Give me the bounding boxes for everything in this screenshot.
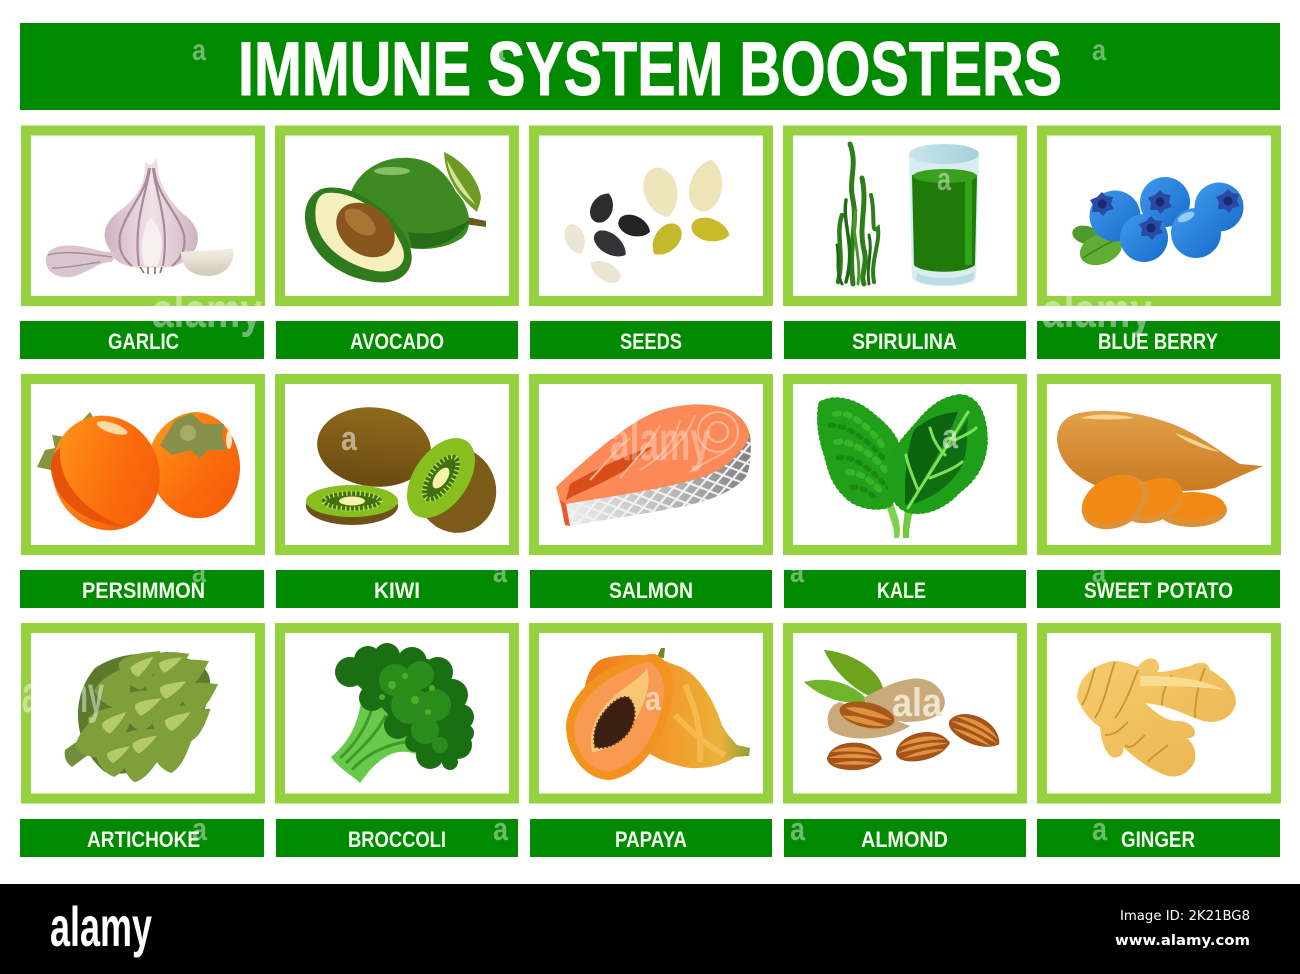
label: papaya: PAPAYA [615,827,687,852]
icon: kiwis [306,402,506,542]
icon: ginger [1077,658,1236,776]
footer bar [0,884,1300,974]
label: almond: ALMOND [861,827,948,852]
label: blue berry [1037,285,1280,359]
label: salmon [530,570,772,608]
label: persimmon: PERSIMMON [82,578,205,603]
label: kiwi: KIWI [374,578,420,603]
label: spirulina: SPIRULINA [852,329,957,354]
label: avocado: AVOCADO [350,329,444,354]
title banner: a [192,34,206,67]
label: seeds: SEEDS [620,329,682,354]
icon: sweet potato [1057,411,1263,540]
icon: spirulina glass [909,144,979,286]
label: ginger [1037,811,1280,857]
label: spirulina [784,321,1026,359]
panel: kale [784,379,1026,608]
panel: kiwi [276,379,518,608]
image id: Image ID: 2K21BG8 [1120,909,1250,924]
label: seeds [530,321,772,359]
icon: artichoke [22,637,225,784]
title banner: a [1092,34,1106,67]
title banner [20,23,1280,112]
label: sweet potato: SWEET POTATO [1084,578,1233,603]
icon: artichoke: alamy [22,666,104,724]
label: kale: a [790,556,804,589]
icon: blueberries [1070,177,1244,271]
label: garlic: alamy [152,285,262,338]
label: blue berry: alamy [1042,285,1152,338]
panel: ginger [1037,628,1280,857]
label: kiwi: a [493,556,507,589]
label: sweet potato [1037,556,1280,608]
label: salmon: SALMON [609,578,693,603]
icon: kiwis: a [341,420,358,458]
panel: avocado [276,130,518,359]
icon: broccoli [331,643,474,783]
icon: kale leaves [822,399,983,538]
panel: broccoli [276,628,518,857]
logo: alamy: alamy [50,895,152,958]
label: kiwi [276,556,518,608]
label: broccoli [276,811,518,857]
icon: almonds: ala [892,681,943,725]
icon: spirulina glass: a [937,161,951,197]
label: almond [784,811,1026,857]
label: artichoke: a [192,811,207,847]
panel: artichoke [20,628,264,857]
label: ginger: GINGER [1121,827,1195,852]
label: kale [784,556,1026,608]
panel: sweet potato [1037,379,1280,608]
icon: papaya: a [645,680,662,718]
label: persimmon: a [192,556,206,589]
icon: papaya [566,648,750,780]
icon: garlic bulb and cloves [46,158,234,277]
label: kale: KALE [877,578,926,603]
panel: almond [784,628,1026,857]
panel: spirulina [784,130,1026,359]
icon: spirulina frond [837,144,878,284]
panel: blueberry [1037,130,1280,359]
icon: avocado [305,152,486,282]
label: ginger: a [1092,811,1107,847]
label: avocado [276,321,518,359]
panel: persimmon [20,379,264,608]
icon: kale leaves: a [942,418,959,456]
icon: salmon steak [556,404,751,526]
panel: salmon [530,379,772,608]
label: almond: a [790,811,805,847]
panel: seeds [530,130,772,359]
label: artichoke: ARTICHOKE [87,827,200,852]
icon: salmon steak: alamy [610,409,710,472]
website: www.alamy.com [1115,933,1250,949]
icon: persimmons [35,399,240,547]
label: broccoli: a [493,811,508,847]
label: garlic: GARLIC [108,329,179,354]
title banner: a [490,34,505,67]
label: sweet potato: a [1092,556,1106,589]
label: papaya [530,819,772,857]
label: broccoli: BROCCOLI [348,827,446,852]
label: persimmon [20,556,264,608]
label: garlic [20,285,264,359]
label: blue berry: BLUE BERRY [1098,329,1218,354]
icon: seeds [561,156,732,287]
label: artichoke [20,811,264,857]
panel: garlic [20,130,264,359]
title: IMMUNE SYSTEM BOOSTERS [238,27,1062,112]
icon: almonds [804,650,1006,770]
panel: papaya [530,628,772,857]
